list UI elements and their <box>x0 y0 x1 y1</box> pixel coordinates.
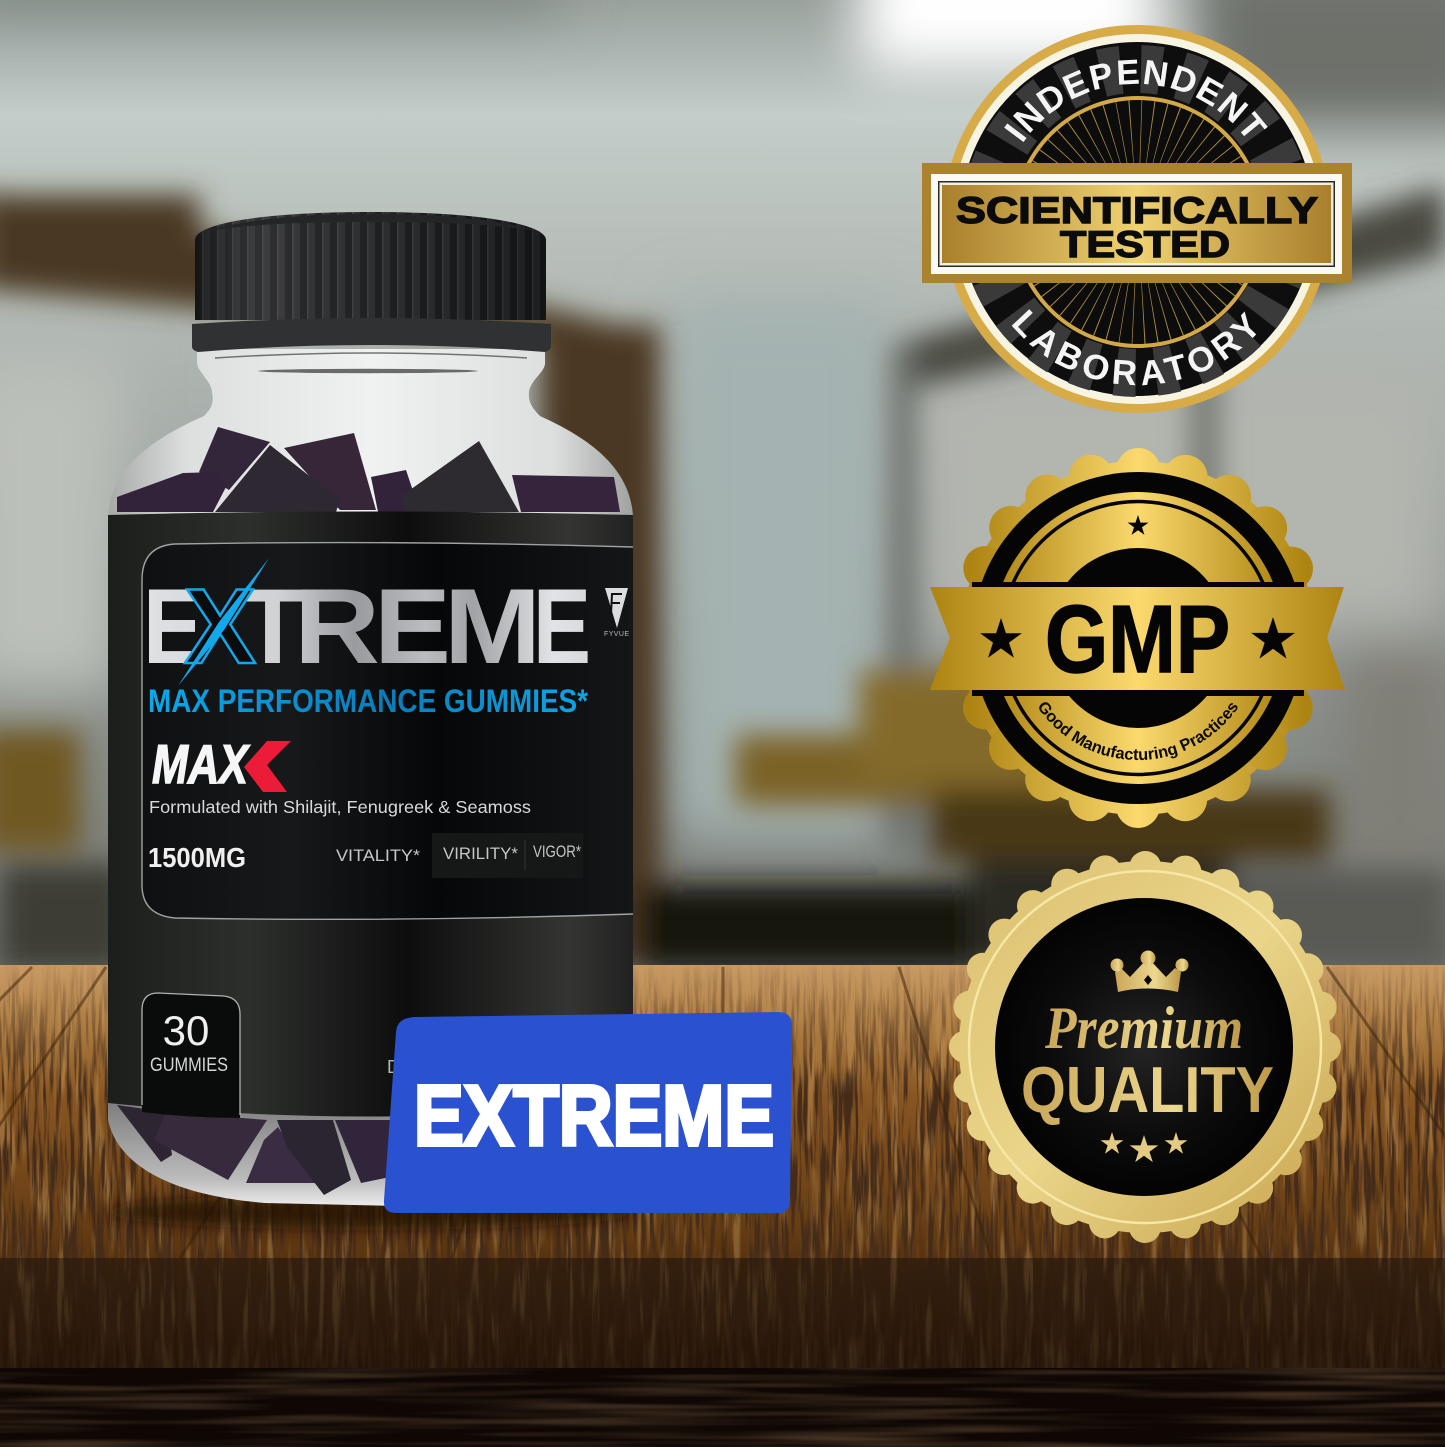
badge: GMP <box>930 448 1345 828</box>
count box <box>142 993 240 1118</box>
ribbon stars <box>980 617 1295 659</box>
blue spike <box>178 558 269 686</box>
gold ribbon: SCIENTIFICALLY <box>956 190 1318 231</box>
gold ribbon <box>922 163 1352 283</box>
bottle shadow <box>100 1194 640 1230</box>
badge: scientifically tested <box>922 25 1352 413</box>
gummies in top of bottle <box>117 427 620 512</box>
curved text independent: INDEPENDENT <box>1004 60 1268 142</box>
premium script: Premium <box>1044 995 1243 1061</box>
blue X accent: X <box>184 566 256 686</box>
curved text laboratory: LABORATORY <box>1012 309 1256 386</box>
red chevron <box>244 741 291 792</box>
gold ribbon <box>930 587 1345 690</box>
count box: GUMMIES <box>150 1055 228 1076</box>
brand name EXTREME: E <box>533 566 591 686</box>
gummies in bottom of bottle <box>117 1105 390 1195</box>
top star <box>1128 515 1148 535</box>
scalloped gold seal <box>959 861 1331 1233</box>
badge: premium quality <box>959 861 1331 1233</box>
bottle base <box>108 1100 400 1206</box>
hidden label letter: D <box>387 1057 400 1077</box>
glass neck highlights <box>215 353 527 373</box>
label inner panel <box>142 543 633 919</box>
benefit tags <box>336 833 583 878</box>
count box: 30 <box>163 1007 209 1054</box>
brand name EXTREME: M <box>444 566 541 686</box>
blurred room background <box>0 0 1445 970</box>
scalloped gold seal <box>961 461 1315 815</box>
label panel border <box>142 543 633 919</box>
brand name EXTREME: E <box>374 566 451 686</box>
bottle glass shoulder <box>108 349 633 520</box>
bottle label wrap <box>108 512 633 1116</box>
three stars <box>1101 1132 1187 1162</box>
product bottle <box>108 212 633 1206</box>
ring stripes <box>985 69 1289 373</box>
brand logo mark: FYVUE <box>604 631 629 638</box>
benefit tags: VIGOR* <box>533 842 581 861</box>
crown icon <box>1110 950 1188 992</box>
brand name EXTREME: R <box>294 566 380 686</box>
brand logo mark <box>604 588 629 638</box>
benefit tags: VIRILITY* <box>443 844 518 863</box>
wooden table <box>0 965 1445 1447</box>
brand name EXTREME <box>143 558 591 686</box>
curved text: Good Manufacturing Practices <box>1039 702 1238 760</box>
bottle cap <box>192 212 551 352</box>
dosage: 1500MG <box>148 842 246 873</box>
quality text: QUALITY <box>1021 1053 1274 1126</box>
benefit tags: VITALITY* <box>336 846 420 865</box>
brand name EXTREME: T <box>241 566 304 686</box>
brand name EXTREME: E <box>143 566 203 686</box>
outer gold ring <box>943 25 1331 413</box>
blue EXTREME card <box>384 1012 792 1213</box>
product subtitle: MAX PERFORMANCE GUMMIES* <box>148 683 588 719</box>
GMP text: GMP <box>1045 586 1230 693</box>
ingredients line: Formulated with Shilajit, Fenugreek & Seamoss <box>149 797 531 817</box>
blue EXTREME card: EXTREME <box>414 1069 774 1164</box>
sunburst <box>1060 144 1216 300</box>
MAX logo: MAX <box>152 733 251 795</box>
gold ribbon: TESTED <box>1060 224 1230 265</box>
